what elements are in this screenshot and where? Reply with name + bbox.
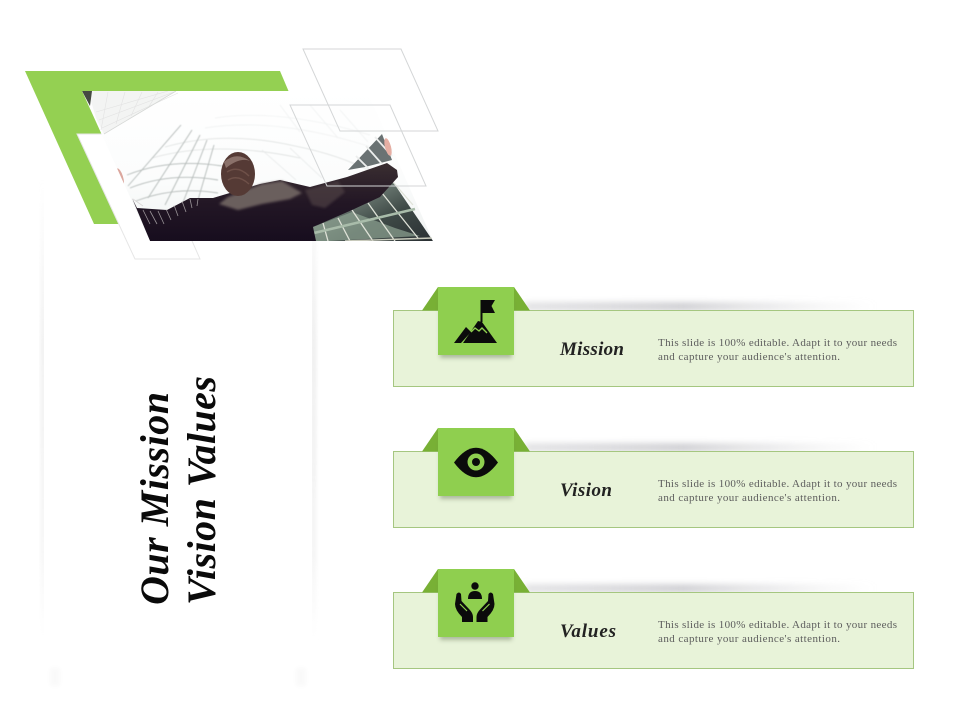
text: Values description: and capture your audience's attention. — [658, 633, 840, 645]
photo man — [132, 152, 398, 241]
icon: mountain with flag — [454, 300, 497, 343]
green parallelogram — [25, 71, 345, 224]
photo top-left building — [82, 91, 178, 134]
photo: man with raised arms among buildings — [80, 90, 440, 245]
title — [132, 376, 224, 605]
thin outline parallelogram upper — [303, 49, 438, 131]
photo right towers — [348, 134, 392, 170]
text: Values description — [658, 619, 897, 645]
text: Vision description — [658, 478, 897, 504]
text: Mission description: and capture your audience's attention. — [658, 351, 840, 363]
panel: title column — [41, 180, 316, 686]
heading: Values: Values — [560, 621, 616, 642]
icon: hands holding person — [455, 582, 494, 622]
icon: eye — [454, 448, 498, 477]
thin outline parallelogram lower — [290, 105, 426, 186]
text: Vision description: and capture your audience's attention. — [658, 492, 840, 504]
photo lower-right building — [313, 182, 433, 241]
card: Vision — [394, 428, 914, 528]
card: Values — [394, 569, 914, 668]
text: Vision description: This slide is 100% editable. Adapt it to your needs — [658, 478, 897, 490]
text: Mission description: This slide is 100% editable. Adapt it to your needs — [658, 337, 897, 349]
heading: Mission: Mission — [559, 339, 624, 360]
card: Mission — [394, 287, 914, 386]
text: Values description: This slide is 100% editable. Adapt it to your needs — [658, 619, 897, 631]
photo grid facade — [126, 116, 368, 206]
title: Our Mission — [132, 392, 177, 605]
title: Vision Values — [179, 376, 224, 605]
text: Mission description — [658, 337, 897, 363]
heading: Vision: Vision — [560, 480, 612, 501]
photo hands — [117, 168, 124, 184]
white parallelogram — [77, 134, 200, 259]
